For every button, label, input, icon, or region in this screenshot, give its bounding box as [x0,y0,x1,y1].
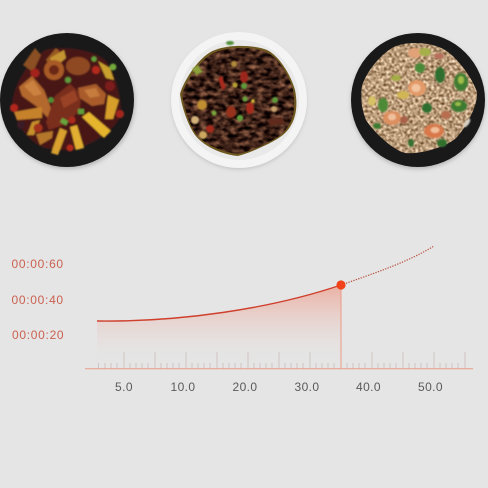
shaded area under curve [97,285,341,366]
x-axis labels: 5.0 [115,380,133,394]
x-axis labels: 30.0 [295,380,319,394]
y-axis labels [12,257,64,342]
x-axis labels: 20.0 [233,380,257,394]
curve: dotted projection [341,246,434,285]
x-axis labels: 10.0 [171,380,195,394]
y-axis labels: 00:00:20 [12,328,64,342]
x-axis ruler [85,352,473,369]
chart: cooking time curve [12,246,473,394]
x-axis labels [115,380,443,394]
x-axis labels: 40.0 [356,380,381,394]
curve: solid part [97,285,341,321]
marker dot [336,280,346,290]
x-axis labels: 50.0 [418,380,443,394]
marker drop line [340,285,342,369]
y-axis labels: 00:00:60 [12,257,64,271]
dish: stir-fried beef on white plate [171,32,307,169]
dish: shrimp fried rice on black plate [351,33,485,169]
y-axis labels: 00:00:40 [12,293,64,307]
dish: braised chicken on black plate [0,33,135,169]
